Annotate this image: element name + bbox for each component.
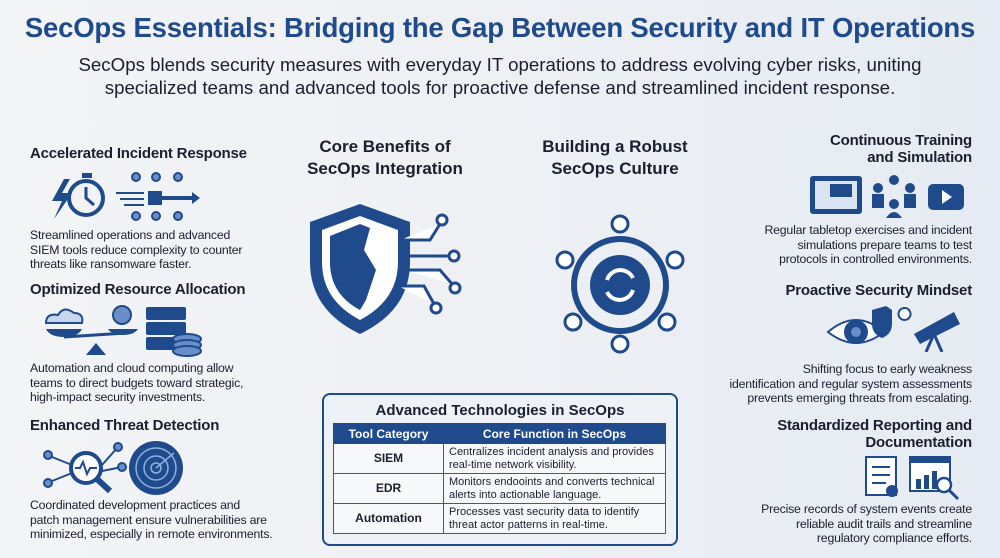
- text: Streamlined operations and advanced: [30, 228, 230, 242]
- panel: accelerated incident response: [30, 145, 247, 271]
- heading: and Simulation: [867, 149, 972, 166]
- text: patch management ensure vulnerabilities are: [30, 512, 267, 526]
- heading: Documentation: [865, 434, 972, 451]
- text: simulations prepare teams to test: [797, 238, 972, 252]
- table: Tool Category: [349, 426, 428, 440]
- heading: core benefits: Core Benefits of: [319, 137, 451, 156]
- table: Centralizes incident analysis and provides real-time network visibility.: [449, 446, 654, 470]
- text: Automation and cloud computing allow: [30, 361, 233, 375]
- text: [764, 223, 972, 266]
- text: high-impact security investments.: [30, 390, 205, 404]
- title: SecOps Essentials: Bridging the Gap Between Security and IT Operations: [25, 12, 975, 43]
- table: [333, 423, 666, 534]
- icon: shield circuit: [310, 204, 462, 334]
- heading: [777, 417, 972, 451]
- text: [30, 361, 243, 404]
- table: EDR: [376, 481, 401, 495]
- icon: eye shield telescope: [826, 306, 960, 352]
- icon: team circle: [556, 214, 684, 354]
- panel: enhanced threat detection: [30, 417, 273, 541]
- text: [761, 502, 972, 545]
- table title: Advanced Technologies in SecOps: [376, 402, 624, 419]
- text: Regular tabletop exercises and incident: [764, 223, 972, 237]
- heading: core benefits: [307, 137, 463, 178]
- text: identification and regular system assessments: [729, 376, 972, 390]
- panel: continuous training: [764, 132, 972, 266]
- text: protocols in controlled environments.: [779, 252, 972, 266]
- text: [30, 498, 273, 541]
- text: reliable audit trails and streamline: [796, 516, 972, 530]
- icon: stopwatch and network: [52, 172, 200, 221]
- table: Processes vast security data to identify threat actor patterns in real-time.: [449, 506, 639, 530]
- table: Automation: [355, 511, 422, 525]
- heading: [830, 132, 972, 166]
- table: Monitors endooints and converts technical alerts into actionable language.: [449, 476, 654, 500]
- text: [30, 228, 242, 271]
- heading: Continuous Training: [830, 132, 972, 149]
- heading: Enhanced Threat Detection: [30, 417, 219, 434]
- subtitle: specialized teams and advanced tools for proactive defense and streamlined incident response.: [105, 77, 895, 98]
- heading: building culture: SecOps Culture: [551, 159, 679, 178]
- text: Shifting focus to early weakness: [803, 362, 972, 376]
- text: SIEM tools reduce complexity to counter: [30, 242, 242, 256]
- table: Core Function in SecOps: [483, 426, 626, 440]
- subtitle: [78, 54, 922, 98]
- text: Precise records of system events create: [761, 502, 972, 516]
- text: minimized, especially in remote environments.: [30, 527, 273, 541]
- heading: core benefits: SecOps Integration: [307, 159, 463, 178]
- text: Coordinated development practices and: [30, 498, 240, 512]
- icon: documents and chart: [865, 456, 959, 500]
- icon: scale and servers: [45, 305, 202, 357]
- heading: Proactive Security Mindset: [785, 282, 972, 299]
- text: regulatory compliance efforts.: [817, 531, 972, 545]
- icon: training media: [810, 175, 964, 218]
- heading: Standardized Reporting and: [777, 417, 972, 434]
- heading: building culture: [542, 137, 688, 178]
- panel: proactive mindset: [729, 282, 972, 405]
- subtitle: SecOps blends security measures with everyday IT operations to address evolving cyber risks, uniting: [78, 54, 922, 75]
- icon: magnifier and radar: [43, 441, 183, 495]
- panel: standardized reporting: [761, 417, 972, 545]
- heading: building culture: Building a Robust: [542, 137, 688, 156]
- heading: Accelerated Incident Response: [30, 145, 247, 162]
- panel: advanced technologies table: [322, 393, 678, 546]
- text: prevents emerging threats from escalating.: [747, 391, 972, 405]
- text: [729, 362, 972, 405]
- text: teams to direct budgets toward strategic,: [30, 376, 243, 390]
- table: SIEM: [374, 451, 403, 465]
- text: threats like ransomware faster.: [30, 257, 191, 271]
- heading: Optimized Resource Allocation: [30, 281, 245, 298]
- panel: optimized resource allocation: [30, 281, 245, 404]
